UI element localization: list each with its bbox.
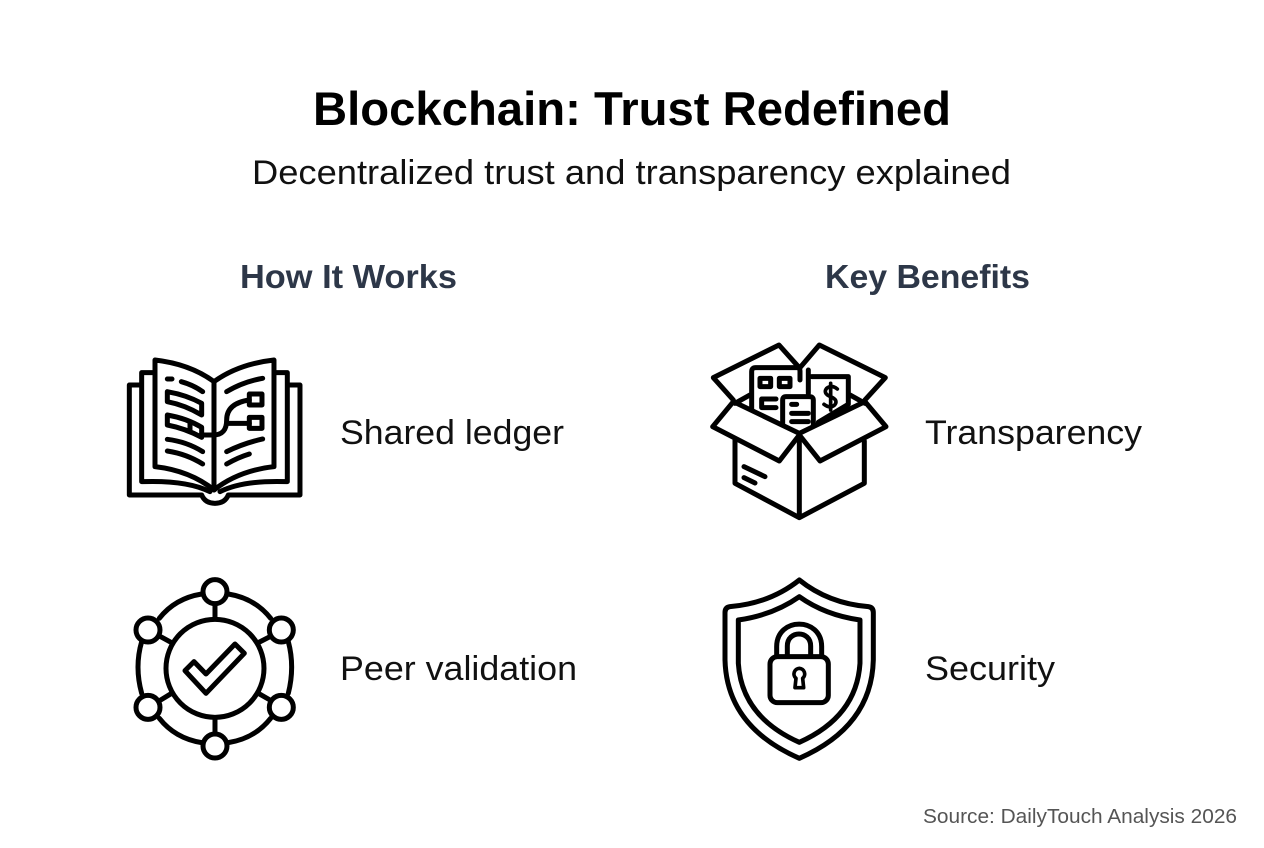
heading: how it works: How It Works	[240, 258, 457, 295]
icon: peer validation network	[136, 580, 293, 758]
panel: how it works	[129, 258, 577, 758]
source note: Source: DailyTouch Analysis 2026	[923, 806, 1237, 828]
title: Blockchain: Trust Redefined	[313, 82, 951, 135]
panel: key benefits	[713, 258, 1142, 758]
label: security: Security	[925, 650, 1055, 688]
icon: open book ledger	[129, 360, 300, 503]
label: transparency: Transparency	[925, 414, 1142, 452]
heading: key benefits: Key Benefits	[825, 258, 1030, 295]
label: shared ledger: Shared ledger	[340, 414, 564, 452]
icon: open box with documents	[713, 345, 886, 518]
icon: shield with padlock	[725, 580, 873, 758]
label: peer validation: Peer validation	[340, 650, 577, 688]
subtitle: Decentralized trust and transparency explained	[252, 154, 1011, 192]
